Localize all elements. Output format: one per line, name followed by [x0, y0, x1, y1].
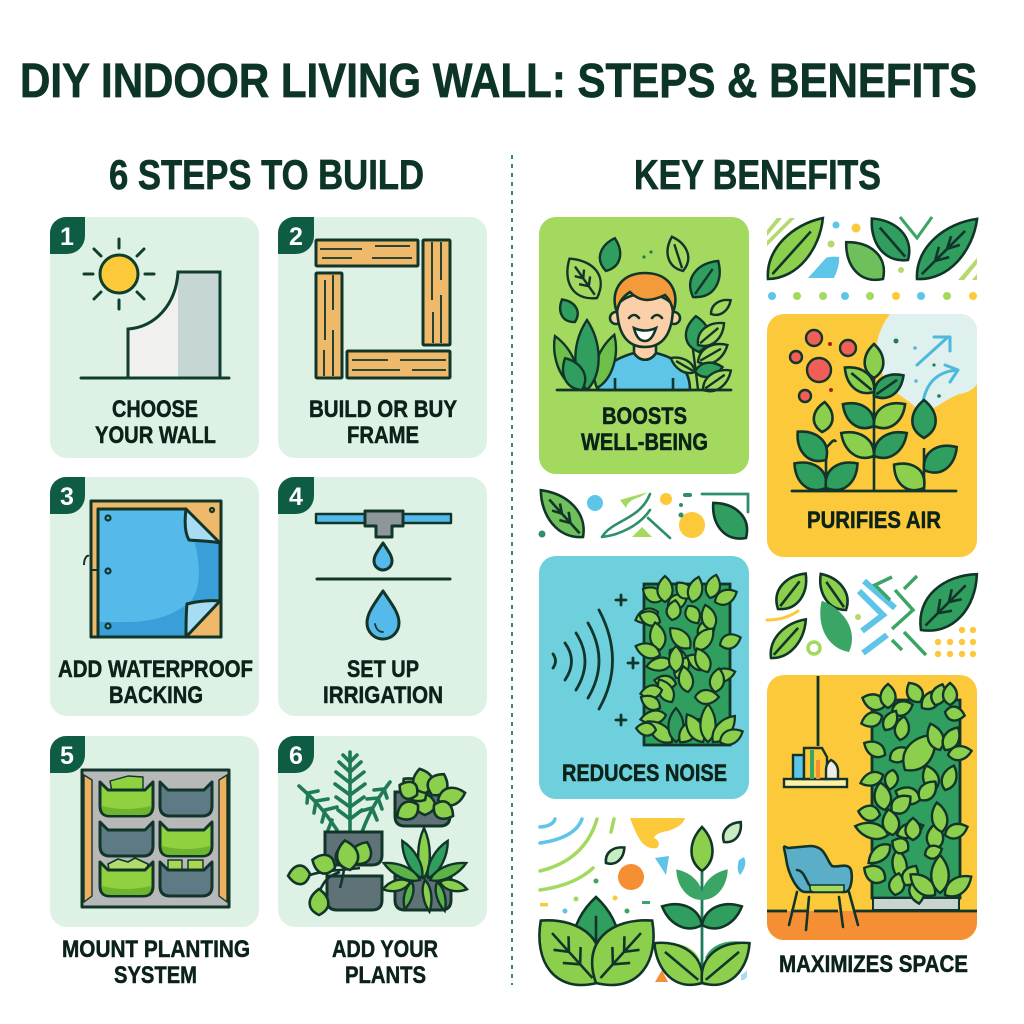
floor	[767, 911, 977, 940]
icon: spider plant	[381, 828, 469, 912]
icon: pots	[325, 792, 451, 910]
label: BOOSTS	[602, 403, 687, 430]
icon: smiling person	[598, 273, 690, 390]
panel: boosts well-being	[539, 217, 749, 474]
decoration: bottom left plants and arcs	[521, 818, 760, 1001]
icon: pothos vine	[287, 838, 376, 915]
panel: step 2 build or buy frame: 2	[289, 223, 303, 251]
icon: pipe and drops	[316, 511, 451, 639]
panel: step 6 add your plants: 6	[289, 742, 303, 770]
heading: 6 steps to build: 6 STEPS TO BUILD	[109, 151, 424, 198]
label: YOUR WALL	[95, 422, 216, 449]
icon: fern in pot	[299, 752, 390, 832]
icon: lamp cord and shelf with books	[784, 676, 847, 787]
panel: step 3 add waterproof backing: 3	[60, 483, 74, 511]
panel: step 6 add your plants	[278, 736, 487, 989]
panel: reduces noise	[539, 556, 749, 799]
label: PLANTS	[345, 962, 426, 989]
icon: three plants	[787, 344, 963, 497]
panel: maximizes space	[767, 675, 977, 978]
label: BUILD OR BUY	[309, 396, 457, 423]
label	[323, 656, 443, 709]
icon: chair	[784, 846, 858, 930]
icon: sun	[84, 239, 154, 309]
label: PURIFIES AIR	[807, 507, 941, 534]
icon: top right plant	[393, 766, 467, 825]
panel: step 5 mount planting system: 5	[60, 742, 74, 770]
panel: step 4 set up irrigation	[278, 477, 487, 716]
icon: right plant	[668, 315, 736, 397]
heading: key benefits: KEY BENEFITS	[634, 151, 881, 198]
label: REDUCES NOISE	[562, 760, 727, 787]
label: SET UP	[347, 656, 419, 683]
label: ADD WATERPROOF	[58, 656, 253, 683]
label: IRRIGATION	[323, 682, 443, 709]
label	[95, 396, 216, 449]
label	[62, 936, 250, 989]
label: SYSTEM	[114, 962, 197, 989]
clean air cloud	[876, 314, 977, 410]
icon: planting frame with pockets	[82, 770, 229, 907]
label: MAXIMIZES SPACE	[779, 951, 968, 978]
icon: living wall	[633, 573, 746, 748]
icon: sound waves	[553, 595, 638, 725]
icon: wood planks	[316, 240, 450, 378]
panel: step 4 set up irrigation: 4	[289, 483, 303, 511]
panel: step 1 choose your wall	[50, 217, 259, 458]
decoration: leaves and shapes under boosts card	[530, 481, 755, 547]
icon: pollutant particles	[790, 330, 856, 402]
panel: step 2 build or buy frame	[278, 217, 487, 458]
panel: step 3 add waterproof backing	[50, 477, 259, 716]
label: BACKING	[109, 682, 203, 709]
decoration: top right leaves and dots	[757, 207, 989, 300]
icon: wall	[81, 272, 229, 378]
icon: floating leaves	[555, 234, 734, 326]
icon: living wall	[853, 679, 976, 910]
label	[58, 656, 253, 709]
icon: clean air arrows	[917, 337, 958, 407]
icon: left plant	[547, 320, 623, 395]
label	[309, 396, 457, 449]
panel: purifies air	[767, 314, 977, 557]
icon: backing sheet on board	[84, 501, 221, 637]
panel: step 5 mount planting system	[50, 736, 259, 989]
label	[581, 403, 708, 456]
label: MOUNT PLANTING	[62, 936, 250, 963]
panel: step 1 choose your wall: 1	[60, 223, 74, 251]
label: ADD YOUR	[332, 936, 438, 963]
decoration: leaves and chevrons	[763, 561, 990, 665]
label	[332, 936, 438, 989]
label: WELL-BEING	[581, 429, 708, 456]
label: CHOOSE	[112, 396, 198, 423]
label: FRAME	[347, 422, 419, 449]
